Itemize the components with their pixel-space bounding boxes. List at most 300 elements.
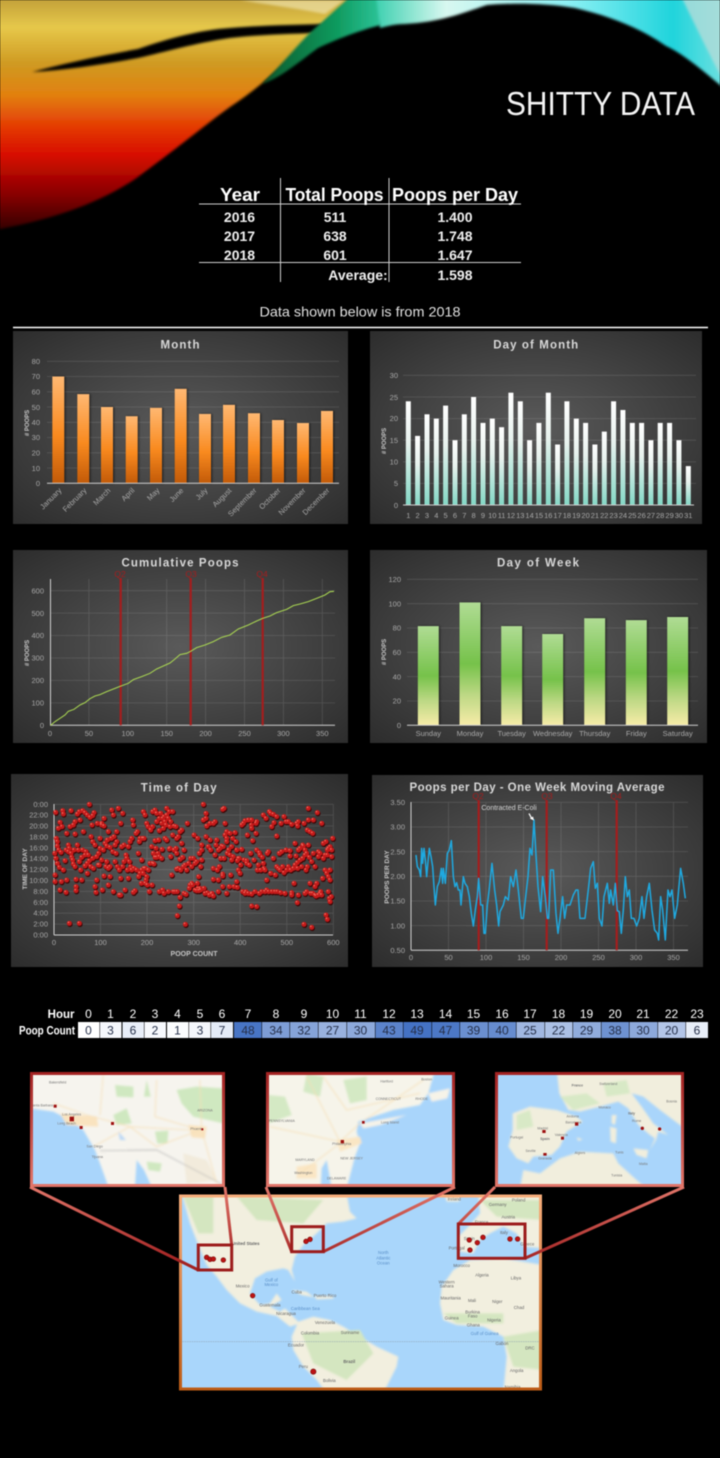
map inset: northeast united states: Long Island	[381, 1120, 399, 1124]
map inset: spain and italy: Valencia	[555, 1133, 568, 1137]
panel: time of day scatter chart: 4:00	[33, 908, 48, 918]
map inset: spain and italy: Malta	[639, 1162, 648, 1166]
panel: day of week bar chart: Friday	[626, 729, 647, 738]
map inset: spain and italy: Algiers	[575, 1151, 586, 1155]
panel: time of day scatter chart: 12:00	[29, 865, 48, 874]
main world map: Caribbean Sea	[291, 1306, 320, 1311]
panel: month bar chart: October	[257, 486, 283, 511]
main world map: Gulf of	[265, 1277, 278, 1282]
main world map: Austria	[502, 1214, 516, 1219]
panel: time of day scatter chart: 0	[52, 938, 56, 947]
panel: cumulative poops line chart: # POOPS	[25, 640, 31, 666]
hour heat table: 21	[636, 1007, 650, 1021]
hour heat table: 2	[130, 1007, 137, 1021]
panel: month bar chart: 0	[36, 479, 40, 488]
panel: month bar chart: January	[38, 486, 64, 511]
panel: day of week bar chart: Sunday	[416, 729, 441, 738]
hour heat table: 49	[410, 1024, 424, 1038]
panel: moving average line chart: 100	[480, 953, 492, 962]
main world map: United States	[232, 1241, 260, 1246]
panel: time of day scatter chart: 500	[281, 938, 293, 947]
main world map: Namibia	[505, 1385, 521, 1390]
main world map: Nigeria	[487, 1317, 501, 1322]
main world map: Nicaragua	[276, 1311, 296, 1316]
panel: day of month bar chart: 16	[544, 511, 552, 520]
hour heat table: 19	[580, 1007, 593, 1021]
panel: day of month bar chart: 3	[425, 511, 429, 520]
map inset: spain and italy: Rome	[632, 1119, 641, 1123]
map inset: southwest united states: ARIZONA	[197, 1109, 213, 1113]
hour heat table: 2	[152, 1024, 159, 1038]
hour heat table: 39	[467, 1024, 480, 1038]
map inset: southwest united states: Phoenix	[190, 1127, 203, 1131]
panel: day of month bar chart: 5	[444, 511, 448, 520]
panel: moving average line chart: 2.00	[390, 872, 405, 881]
hour heat table: 43	[382, 1024, 396, 1038]
panel: moving average line chart: 200	[555, 953, 567, 962]
summary table: 2017	[224, 228, 255, 244]
hour heat table: 5	[197, 1007, 204, 1021]
panel: month bar chart: July	[194, 486, 210, 502]
map inset: northeast united states: MARYLAND	[295, 1158, 315, 1162]
summary table: Average:	[328, 267, 388, 283]
map inset: northeast united states	[265, 1070, 457, 1188]
panel: day of month bar chart: 1	[406, 511, 410, 520]
hour heat table: 40	[495, 1024, 509, 1038]
panel: month bar chart: 40	[32, 418, 40, 427]
panel: day of month bar chart: 5	[394, 479, 398, 488]
panel: cumulative poops line chart: 300	[31, 654, 44, 662]
main world map: Peru	[299, 1364, 308, 1369]
panel: day of month bar chart	[370, 331, 702, 524]
panel: time of day scatter chart: 18:00	[29, 832, 48, 841]
hour heat table: 13	[410, 1007, 424, 1021]
panel: day of month bar chart: Day of Month	[493, 340, 578, 352]
panel: moving average line chart: 350	[667, 953, 680, 962]
panel: moving average line chart: 1.00	[390, 921, 405, 930]
panel: cumulative poops line chart: 400	[31, 631, 44, 640]
panel: month bar chart: 70	[32, 372, 40, 381]
main world map	[179, 1193, 543, 1393]
panel: moving average line chart: Q4	[610, 791, 622, 801]
map inset: northeast united states: PENNSYLVANIA	[269, 1119, 295, 1123]
hour heat table: 15	[467, 1007, 480, 1021]
main world map: Ireland	[448, 1196, 462, 1201]
main world map: Burkina	[465, 1309, 481, 1314]
panel: day of week bar chart: Day of Week	[497, 558, 580, 570]
panel: cumulative poops line chart: 200	[199, 729, 212, 738]
map inset: spain and italy: Tunis	[615, 1150, 624, 1154]
panel: month bar chart: 60	[32, 388, 40, 396]
map inset: spain and italy: France	[572, 1084, 583, 1088]
hour heat table: 32	[297, 1024, 311, 1038]
panel: month bar chart: Month	[160, 340, 200, 352]
panel: day of month bar chart: 18	[563, 511, 571, 520]
map inset: spain and italy	[495, 1070, 687, 1188]
main world map: Sahara	[440, 1283, 454, 1288]
hour heat table: 7	[219, 1024, 226, 1038]
annotation: e-coli	[481, 805, 537, 820]
main world map: Guatemala	[259, 1303, 281, 1308]
main world map: Libya	[511, 1275, 522, 1280]
map inset: northeast united states: Philadelphia	[332, 1142, 351, 1146]
panel: day of week bar chart: 60	[393, 648, 401, 657]
hour heat table: 9	[301, 1007, 308, 1021]
panel: day of month bar chart: 10	[488, 511, 496, 520]
hour heat table: 22	[552, 1024, 565, 1038]
panel: day of week bar chart: 80	[393, 624, 401, 633]
hour heat table: 0	[85, 1024, 92, 1038]
map inset: northeast united states: CONNECTICUT	[376, 1097, 402, 1101]
panel: time of day scatter chart: 16:00	[29, 843, 48, 852]
hour heat table: 20	[608, 1007, 622, 1021]
panel: day of month bar chart: 20	[390, 414, 398, 423]
summary table: Year	[220, 185, 260, 205]
hour heat table: 30	[354, 1024, 367, 1038]
panel: day of month bar chart: 2	[416, 511, 420, 520]
hour heat table: 20	[665, 1024, 678, 1038]
panel: day of month bar chart: 6	[453, 511, 457, 520]
panel: time of day scatter chart: 300	[187, 938, 200, 947]
main world map: Mexico	[236, 1283, 250, 1288]
panel: day of month bar chart: 22	[600, 511, 608, 520]
map inset: southwest united states	[30, 1072, 225, 1187]
summary table: 511	[324, 209, 347, 225]
panel: day of month bar chart: 26	[637, 511, 646, 520]
panel: day of week bar chart	[370, 550, 707, 743]
main world map: Gabon	[495, 1341, 509, 1346]
panel: cumulative poops line chart: 100	[122, 729, 134, 738]
summary table: 1.647	[437, 247, 473, 263]
panel: moving average line chart: Q3	[541, 791, 553, 801]
hour heat table: 30	[636, 1024, 650, 1038]
hour heat table: 3	[107, 1024, 114, 1038]
panel: month bar chart: June	[168, 486, 185, 504]
map inset: southwest united states: San Diego	[87, 1145, 103, 1149]
map inset: northeast united states: NEW JERSEY	[340, 1156, 364, 1160]
hour heat table	[19, 1007, 708, 1038]
scatter points	[54, 803, 333, 928]
panel: cumulative poops line chart: 0	[48, 729, 52, 738]
panel: day of month bar chart: 15	[535, 511, 543, 520]
panel: day of month bar chart: 19	[572, 511, 580, 520]
map inset: spain and italy: Barcelona	[565, 1120, 581, 1124]
panel: cumulative poops line chart: 600	[31, 586, 44, 596]
panel: day of week bar chart: Wednesday	[533, 729, 573, 738]
panel: day of month bar chart: 27	[647, 511, 655, 520]
map inset: spain and italy: Italy	[628, 1111, 635, 1115]
panel: moving average line chart: 0	[409, 953, 413, 962]
panel: day of month bar chart: 17	[553, 511, 562, 520]
hour heat table: 1	[174, 1024, 181, 1038]
panel: day of month bar chart: 15	[390, 436, 398, 445]
map inset: spain and italy: Madrid	[537, 1126, 548, 1130]
panel: moving average line chart: 150	[517, 953, 530, 962]
panel: time of day scatter chart: 400	[234, 938, 246, 947]
panel: time of day scatter chart: Time of Day	[141, 783, 217, 795]
hour heat table: 6	[130, 1024, 137, 1038]
panel: time of day scatter chart	[11, 774, 348, 967]
panel: cumulative poops line chart: 350	[316, 729, 329, 738]
map inset: spain and italy: Spain	[540, 1137, 550, 1141]
panel: day of month bar chart: 11	[498, 511, 505, 520]
hour heat table: 47	[439, 1024, 452, 1038]
map inset: spain and italy: Seville	[526, 1149, 536, 1153]
panel: day of month bar chart: 12	[507, 511, 515, 520]
panel: month bar chart: December	[301, 486, 332, 517]
panel: moving average line chart: 250	[592, 953, 605, 962]
main world map: North	[378, 1250, 389, 1255]
main world map: Mali	[468, 1298, 476, 1303]
panel: cumulative poops line chart: 150	[160, 729, 173, 738]
panel: time of day scatter chart: 22:00	[29, 811, 48, 820]
map inset: southwest united states: Los Angeles	[62, 1112, 81, 1116]
hour heat table: 1	[107, 1007, 114, 1021]
panel: day of month bar chart: 7	[462, 511, 466, 520]
header swoosh artwork	[0, 0, 720, 229]
main world map: Western	[439, 1279, 455, 1284]
title: SHITTY DATA	[506, 85, 695, 122]
main world map: Ocean	[377, 1261, 390, 1266]
panel: cumulative poops line chart: 300	[277, 729, 290, 738]
map inset: spain and italy: Granada	[538, 1156, 552, 1160]
panel: time of day scatter chart: 2:00	[33, 920, 48, 928]
main world map: Brazil	[343, 1359, 355, 1364]
panel: day of month bar chart: 31	[684, 511, 692, 520]
panel: moving average line chart: POOPS PER DAY	[384, 850, 391, 904]
panel: time of day scatter chart: 14:00	[29, 854, 48, 863]
hour heat table: 3	[152, 1007, 159, 1021]
main world map: Bolivia	[323, 1378, 336, 1383]
panel: cumulative poops line chart	[13, 550, 348, 743]
hour heat table: 6	[219, 1007, 226, 1021]
panel: day of week bar chart: 40	[393, 672, 401, 681]
summary table: 1.748	[437, 228, 473, 244]
panel: time of day scatter chart: 100	[94, 938, 107, 947]
map inset: northeast united states: DELAWARE	[327, 1176, 347, 1180]
panel: cumulative poops line chart: Cumulative Poops	[122, 558, 238, 570]
panel: moving average line chart: 0.50	[390, 946, 405, 955]
map inset: spain and italy: Monaco	[598, 1106, 611, 1110]
panel: time of day scatter chart: 20:00	[29, 822, 48, 830]
hour heat table: Poop Count	[19, 1026, 75, 1038]
map inset: northeast united states: Washington	[294, 1171, 313, 1175]
panel: day of week bar chart: Tuesday	[497, 729, 526, 738]
panel: cumulative poops line chart: 500	[31, 609, 44, 618]
panel: moving average line chart: 1.50	[390, 897, 405, 906]
main world map: Spain	[464, 1236, 475, 1241]
panel: day of month bar chart: 8	[472, 511, 476, 520]
panel: month bar chart: 10	[32, 464, 40, 473]
panel: day of month bar chart: 13	[516, 511, 524, 520]
panel: day of week bar chart: 100	[388, 599, 401, 608]
summary table: 1.400	[437, 209, 473, 225]
panel: time of day scatter chart: 600	[327, 938, 340, 947]
map inset: spain and italy: Portugal	[510, 1136, 523, 1140]
panel: day of month bar chart: 29	[665, 511, 674, 520]
main world map: Portugal	[449, 1245, 465, 1250]
panel: day of month bar chart: 25	[390, 393, 398, 402]
annotation: e-coli: Contracted E-Coli	[481, 805, 537, 812]
main world map: France	[475, 1220, 489, 1225]
map inset: spain and italy: Andorra	[566, 1114, 579, 1118]
hour heat table: 3	[197, 1024, 204, 1038]
hour heat table: 29	[580, 1024, 593, 1038]
panel: cumulative poops line chart: 50	[85, 729, 93, 738]
panel: month bar chart: 80	[32, 357, 40, 366]
panel: day of week bar chart: Saturday	[663, 729, 693, 738]
summary table: 2018	[224, 247, 255, 263]
panel: moving average line chart	[372, 775, 703, 967]
main world map: Greece	[520, 1242, 535, 1247]
panel: day of week bar chart: 0	[397, 721, 401, 730]
panel: day of week bar chart: Thursday	[579, 729, 611, 738]
main world map: Italy	[500, 1230, 509, 1235]
main world map: DRC	[525, 1346, 535, 1351]
summary table: Poops per Day	[392, 185, 518, 205]
panel: day of month bar chart: 30	[675, 511, 683, 520]
panel: month bar chart: February	[61, 486, 89, 514]
callout boxes and connector lines	[30, 1187, 684, 1270]
panel: moving average line chart: 3.50	[390, 798, 405, 807]
subtitle note: Data shown below is from 2018	[260, 304, 461, 320]
panel: day of month bar chart: 9	[481, 511, 485, 520]
panel: day of month bar chart: # POOPS	[382, 428, 388, 454]
main world map: Guinea	[445, 1315, 459, 1320]
panel: time of day scatter chart: 6:00	[33, 898, 48, 907]
summary table: 601	[323, 247, 347, 263]
main world map: Ecuador	[288, 1343, 305, 1348]
panel: month bar chart	[13, 331, 348, 524]
panel: cumulative poops line chart: Q2	[114, 569, 126, 579]
hour heat table: 11	[354, 1007, 367, 1021]
panel: day of month bar chart: 0	[394, 501, 398, 510]
panel: month bar chart: March	[91, 486, 112, 507]
panel: month bar chart: # POOPS	[25, 410, 31, 436]
panel: month bar chart: 30	[32, 433, 40, 442]
main world map: Puerto Rico	[314, 1293, 337, 1298]
main world map: Faso	[468, 1313, 478, 1318]
panel: moving average line chart: 2.50	[390, 847, 405, 856]
panel: time of day scatter chart: 0:00	[33, 930, 48, 940]
hour heat table: 25	[523, 1024, 537, 1038]
main world map: Gulf of Guinea	[471, 1331, 499, 1336]
panel: moving average line chart: Q2	[472, 791, 484, 801]
map inset: northeast united states: Hartford	[380, 1080, 393, 1084]
hour heat table: 18	[552, 1007, 565, 1021]
panel: day of month bar chart: 24	[619, 511, 627, 520]
map inset: southwest united states: Bakersfield	[49, 1080, 66, 1084]
hour heat table: 27	[326, 1024, 339, 1038]
panel: day of month bar chart: 21	[591, 511, 599, 520]
main world map: Niger	[492, 1299, 503, 1304]
map inset: southwest united states: Long Beach	[57, 1122, 76, 1126]
panel: day of month bar chart: 30	[390, 371, 398, 380]
main world map: Mexico	[264, 1282, 279, 1287]
map inset: spain and italy: Switzerland	[599, 1082, 617, 1086]
panel: cumulative poops line chart: 200	[31, 676, 44, 685]
panel: month bar chart: April	[119, 486, 137, 503]
main world map: Poland	[512, 1197, 526, 1202]
panel: time of day scatter chart: POOP COUNT	[171, 951, 218, 958]
panel: cumulative poops line chart: Q4	[256, 569, 268, 579]
main world map: Suriname	[341, 1330, 360, 1335]
panel: day of week bar chart: 20	[393, 697, 401, 706]
panel: moving average line chart: 300	[630, 953, 642, 962]
summary table: 1.598	[437, 267, 473, 283]
hour heat table: 34	[269, 1024, 283, 1038]
panel: month bar chart: August	[211, 485, 234, 509]
main world map: Angola	[510, 1368, 524, 1373]
summary table: 638	[323, 228, 347, 244]
panel: time of day scatter chart: 8:00	[33, 887, 48, 896]
hour heat table: 16	[495, 1007, 509, 1021]
panel: day of week bar chart: Monday	[457, 729, 484, 738]
panel: time of day scatter chart: TIME OF DAY	[22, 848, 29, 890]
panel: cumulative poops line chart: Q3	[185, 569, 197, 579]
panel: cumulative poops line chart: 100	[31, 698, 44, 708]
panel: moving average line chart: 50	[444, 953, 453, 962]
main world map: Venezuela	[315, 1320, 336, 1325]
map inset: northeast united states: Boston	[421, 1078, 432, 1082]
hour heat table: 14	[439, 1007, 452, 1021]
summary table	[199, 178, 521, 283]
panel: month bar chart: September	[226, 486, 259, 518]
panel: month bar chart: November	[277, 486, 308, 517]
map inset: spain and italy: Tunisia	[611, 1174, 622, 1178]
hour heat table: 6	[694, 1024, 701, 1038]
panel: day of month bar chart: 14	[525, 511, 534, 520]
main world map: Colombia	[301, 1331, 320, 1336]
main world map: Atlantic	[376, 1255, 391, 1260]
panel: day of month bar chart: 23	[609, 511, 618, 520]
main world map: Mauritania	[441, 1296, 461, 1301]
panel: day of month bar chart: 25	[628, 511, 636, 520]
panel: day of month bar chart: 4	[434, 511, 438, 520]
panel: day of month bar chart: 10	[390, 458, 398, 466]
main world map: Cuba	[291, 1289, 302, 1294]
panel: moving average line chart: 3.00	[390, 823, 405, 832]
main world map: Chad	[514, 1305, 525, 1310]
panel: cumulative poops line chart: 0	[40, 721, 44, 730]
map inset: northeast united states: RHODE	[415, 1097, 429, 1101]
panel: time of day scatter chart: 200	[141, 938, 153, 947]
main world map: Algeria	[475, 1273, 489, 1278]
hour heat table: 48	[241, 1024, 255, 1038]
main world map: Ghana	[467, 1323, 480, 1328]
hour heat table: 12	[382, 1007, 396, 1021]
summary table: Total Poops	[286, 185, 384, 205]
map inset: spain and italy: Bosnia	[666, 1100, 677, 1104]
hour heat table: Hour	[48, 1009, 75, 1021]
panel: time of day scatter chart: 0:00	[33, 800, 48, 809]
panel: month bar chart: May	[145, 486, 162, 502]
panel: month bar chart: 50	[32, 403, 40, 412]
hour heat table: 7	[245, 1007, 252, 1021]
map inset: southwest united states: Santa Barbara	[30, 1104, 53, 1108]
panel: day of month bar chart: 28	[656, 511, 664, 520]
panel: day of week bar chart: # POOPS	[382, 639, 388, 665]
hour heat table: 17	[523, 1007, 537, 1021]
panel: day of week bar chart: 120	[388, 575, 401, 584]
hour heat table: 22	[665, 1007, 678, 1021]
map inset: southwest united states: Tijuana	[92, 1155, 103, 1159]
hour heat table: 23	[690, 1007, 704, 1021]
panel: day of month bar chart: 20	[581, 511, 590, 520]
main world map: Morocco	[453, 1263, 471, 1268]
hour heat table: 4	[174, 1007, 181, 1021]
hour heat table: 38	[608, 1024, 622, 1038]
